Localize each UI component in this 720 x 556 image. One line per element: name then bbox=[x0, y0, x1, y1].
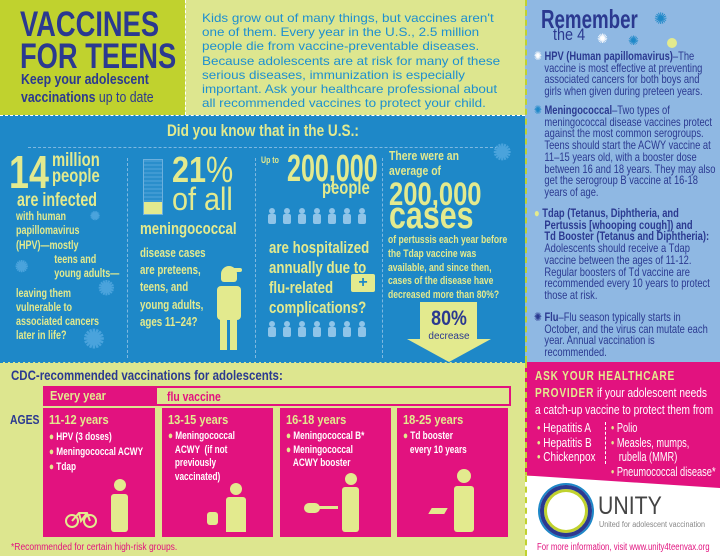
list right: • Pneumococcal disease* bbox=[611, 464, 716, 478]
text: flu: year. Annual vaccination is bbox=[544, 333, 655, 347]
stat: 200,000 hospitalized flu: Up to bbox=[261, 155, 279, 165]
subtitle: vaccinations up to date bbox=[21, 89, 154, 106]
panel: title block bbox=[0, 0, 185, 115]
stat: 200,000 pertussis cases: average of bbox=[389, 163, 441, 178]
icon: virus decorations: ✺ bbox=[654, 11, 667, 28]
stat: 14 million HPV: ✺ bbox=[15, 259, 28, 276]
stat: 21% meningococcal: 21% bbox=[172, 149, 233, 190]
stat: 14 million HPV: million bbox=[52, 150, 100, 171]
stat: 200,000 hospitalized flu: are hospitalized bbox=[269, 238, 369, 257]
text: Tdap: those at risk. bbox=[544, 288, 597, 302]
stat: 200,000 pertussis cases: available, and since then, bbox=[388, 262, 491, 274]
text: HPV bbox=[534, 49, 703, 98]
text: Tdap: Pertussis [whooping cough]) and bbox=[544, 218, 693, 232]
stat: 14 million HPV: leaving them bbox=[16, 286, 71, 300]
text: meningococcal: 11–15 years old, with a booster dose bbox=[544, 150, 697, 164]
stat: 14 million HPV: later in life? bbox=[16, 328, 67, 342]
text: flu: October, and the virus can mutate each bbox=[544, 322, 708, 336]
text: Tdap: ● Tdap (Tetanus, Diphtheria, and bbox=[534, 206, 679, 220]
panel: remember the 4: the 4 bbox=[553, 25, 585, 44]
text: Tdap: Regular boosters of Td vaccine are bbox=[544, 265, 690, 279]
every year bar: Every year bbox=[50, 388, 106, 403]
title: VACCINES bbox=[20, 5, 159, 44]
stat: 200,000 pertussis cases: of pertussis each year before bbox=[388, 234, 507, 246]
text: meningococcal: between 16 and 18 years. They may also bbox=[544, 162, 715, 176]
stat: 14 million HPV: (HPV)—mostly bbox=[16, 238, 79, 252]
stat: 14 million HPV: associated cancers bbox=[16, 314, 99, 328]
stat: 14 million HPV: people bbox=[52, 166, 100, 187]
stat: 200,000 pertussis cases bbox=[388, 140, 511, 362]
box: 18-25 bbox=[397, 408, 508, 537]
stat: 14 million HPV bbox=[9, 146, 120, 354]
stat: 21% meningococcal: young adults, bbox=[140, 297, 203, 312]
panel: unity logo bbox=[525, 476, 720, 556]
stat: 200,000 hospitalized flu: annually due to bbox=[269, 258, 366, 277]
box: 16-18: 16-18 years bbox=[286, 412, 346, 427]
stat: 200,000 hospitalized flu: people bbox=[322, 178, 370, 199]
intro text: Kids grow out of many things, but vaccines aren't bbox=[202, 11, 494, 25]
text: meningococcal: years of age. bbox=[544, 185, 599, 199]
arrow: 80% decrease: decrease bbox=[428, 331, 470, 342]
panel: remember the 4 bbox=[525, 0, 720, 362]
label: ages: AGES bbox=[10, 412, 39, 427]
heading: CDC-recommended vaccinations for adolescents: bbox=[11, 367, 283, 383]
stat: 200,000 pertussis cases: decreased more than 80%? bbox=[388, 289, 499, 301]
box: 16-18 bbox=[280, 408, 391, 537]
arrow: 80% decrease: 80% bbox=[431, 307, 467, 330]
stat: 14 million HPV: teens and bbox=[54, 252, 96, 266]
panel: did you know bbox=[0, 115, 525, 362]
stat: 14 million HPV: vulnerable to bbox=[16, 300, 72, 314]
text: Tdap: vaccine between the ages of 11-12. bbox=[544, 253, 691, 267]
box: 18-25: 18-25 years bbox=[403, 412, 463, 427]
list right: rubella (MMR) bbox=[619, 450, 677, 464]
box: 13-15: 13-15 years bbox=[168, 412, 228, 427]
stat: 200,000 pertussis cases: the Tdap vaccine was bbox=[388, 248, 476, 260]
intro text: one of them. Every year in the U.S., 2.5 million bbox=[202, 25, 479, 39]
box: 11-12: 11-12 years bbox=[49, 412, 109, 427]
intro text: important. Ask your healthcare professional about bbox=[202, 82, 497, 96]
stat: 200,000 pertussis cases: cases of the disease have bbox=[388, 275, 493, 287]
icon: people row bottom bbox=[268, 321, 366, 337]
every year bar bbox=[43, 386, 511, 406]
stat: 14 million HPV: with human bbox=[16, 209, 66, 223]
text: meningococcal: ✺ Meningococcal–Two types of bbox=[534, 103, 670, 117]
intro text: serious diseases, immunization is especially bbox=[202, 68, 465, 82]
text: flu: recommended. bbox=[544, 345, 607, 359]
stat: 200,000 pertussis cases: There were an bbox=[389, 148, 459, 163]
footer link: For more information, visit www.unity4teenvax.org bbox=[537, 542, 710, 553]
box: 11-12: ● HPV (3 doses) bbox=[49, 431, 112, 443]
every year bar: flu vaccine bbox=[167, 389, 221, 404]
heading: Remember bbox=[541, 4, 638, 34]
icon: viruses: ✺ bbox=[90, 209, 100, 223]
icon: virus: ✺ bbox=[493, 140, 511, 165]
title bbox=[20, 5, 176, 76]
icon: teen with skateboard bbox=[217, 266, 242, 350]
stat: 14 million HPV: ✺ bbox=[98, 278, 115, 300]
text: flu: ✺ Flu–Flu season typically starts in bbox=[534, 310, 681, 324]
icon: unity rings bbox=[540, 485, 592, 537]
title: FOR TEENS bbox=[20, 37, 176, 76]
text: meningococcal bbox=[534, 103, 716, 199]
intro text bbox=[185, 0, 525, 115]
box: 16-18: ACWY booster bbox=[293, 457, 350, 469]
panel: remember the 4: ✺ bbox=[628, 33, 639, 48]
box: 13-15: ● Meningococcal bbox=[168, 430, 235, 442]
intro text: Because adolescents are at risk for many of these bbox=[202, 54, 500, 68]
list left: • Hepatitis A bbox=[537, 421, 591, 435]
text: meningococcal: against the most common serogroups. bbox=[544, 126, 704, 140]
intro text: all recommended vaccines to protect your child. bbox=[202, 96, 486, 110]
stat: 14 million HPV: are infected bbox=[17, 190, 97, 211]
subtitle: Keep your adolescent bbox=[21, 71, 149, 88]
stat: 21% meningococcal: of all bbox=[172, 181, 233, 217]
text: Tdap: Adolescents should receive a Tdap bbox=[544, 241, 690, 255]
text: HPV: vaccine is most effective at preventing bbox=[544, 61, 702, 75]
text: meningococcal: Teens should start the ACWY vaccine at bbox=[544, 138, 711, 152]
panel: remember the 4: ✺ bbox=[597, 31, 608, 46]
arrow: 80% decrease bbox=[407, 302, 491, 362]
box: 16-18: ● Meningococcal B* bbox=[286, 430, 364, 442]
list left: • Chickenpox bbox=[537, 450, 596, 464]
panel: CDC schedule bbox=[0, 362, 525, 556]
list left: • Hepatitis B bbox=[537, 436, 592, 450]
text: Tdap bbox=[534, 206, 710, 302]
heading: Did you know that in the U.S.: bbox=[167, 121, 358, 140]
icon: people row top bbox=[268, 208, 366, 224]
subtitle bbox=[21, 71, 154, 106]
text: HPV: associated cancers for both boys and bbox=[544, 72, 699, 86]
text: Tdap: recommended every 10 years to protect bbox=[544, 276, 710, 290]
list right: • Polio bbox=[611, 421, 637, 435]
stat: 21% meningococcal: ages 11–24? bbox=[140, 314, 197, 329]
icon: first aid kit bbox=[351, 274, 375, 292]
stat: 21% meningococcal: disease cases bbox=[140, 245, 206, 260]
box: 13-15: previously bbox=[175, 457, 216, 469]
box: 13-15: ACWY (if not bbox=[175, 444, 227, 456]
logo text: UNITY bbox=[598, 492, 662, 520]
stat: 21% meningococcal: are preteens, bbox=[140, 262, 201, 277]
text: HPV: girls when given during preteen years. bbox=[544, 84, 703, 98]
stat: 200,000 hospitalized flu: flu-related bbox=[269, 278, 333, 297]
list left bbox=[537, 422, 596, 464]
box: 13-15 bbox=[162, 408, 273, 537]
stat: 200,000 pertussis cases: cases bbox=[389, 195, 474, 237]
stat: 200,000 hospitalized flu: complications? bbox=[269, 298, 366, 317]
intro text: people die from vaccine-preventable diseases. bbox=[202, 39, 479, 53]
list right bbox=[611, 422, 716, 476]
box: 11-12: ● Tdap bbox=[49, 461, 76, 473]
footnote: *Recommended for certain high-risk groups. bbox=[11, 542, 177, 553]
text: Tdap: Td Booster (Tetanus and Diphtheria): bbox=[544, 229, 709, 243]
stat: 200,000 pertussis cases: 200,000 bbox=[389, 176, 482, 212]
list right: • Measles, mumps, bbox=[611, 436, 689, 450]
stat: 21% meningococcal bbox=[140, 149, 242, 350]
text: HPV: ✺ HPV (Human papillomavirus)–The bbox=[534, 49, 694, 63]
box: 16-18: ● Meningococcal bbox=[286, 444, 353, 456]
panel: ask your healthcare provider: ASK YOUR HEALTHCARE bbox=[535, 368, 675, 383]
stat: 21% meningococcal: teens, and bbox=[140, 279, 188, 294]
panel: ask your healthcare provider: PROVIDER if your adolescent needs bbox=[535, 385, 707, 400]
stat: 21% meningococcal: meningococcal bbox=[140, 219, 237, 238]
box: 11-12 bbox=[43, 408, 155, 537]
box: 18-25: ● Td booster bbox=[403, 430, 453, 442]
icon: boy with bike bbox=[114, 479, 126, 491]
icon: adult with grad cap bbox=[457, 469, 471, 483]
stat: 14 million HPV: young adults— bbox=[54, 266, 119, 280]
stat: 200,000 hospitalized flu: 200,000 bbox=[287, 148, 378, 190]
stat: 14 million HPV: papillomavirus bbox=[16, 223, 80, 237]
stat: 14 million HPV: ✺ bbox=[83, 324, 105, 354]
box: 13-15: vaccinated) bbox=[175, 470, 220, 482]
box: 11-12: ● Meningococcal ACWY bbox=[49, 446, 143, 458]
text: meningococcal: meningococcal disease vaccines protect bbox=[544, 115, 712, 129]
icon: first aid kit: + bbox=[358, 274, 368, 291]
text: United for adolescent vaccination bbox=[599, 520, 705, 529]
panel: ask your healthcare provider bbox=[525, 362, 720, 488]
panel: ask your healthcare provider: a catch-up vaccine to protect them from bbox=[535, 402, 713, 417]
text: meningococcal: get the serogroup B vaccine at 16-18 bbox=[544, 173, 698, 187]
box: 18-25: every 10 years bbox=[410, 444, 467, 456]
stat: 14 million HPV: 14 bbox=[9, 146, 49, 198]
stat: 200,000 hospitalized flu bbox=[261, 148, 378, 337]
text: flu bbox=[534, 310, 708, 359]
icon: girl with phone bbox=[230, 483, 242, 495]
icon: girl with car key bbox=[345, 473, 357, 485]
